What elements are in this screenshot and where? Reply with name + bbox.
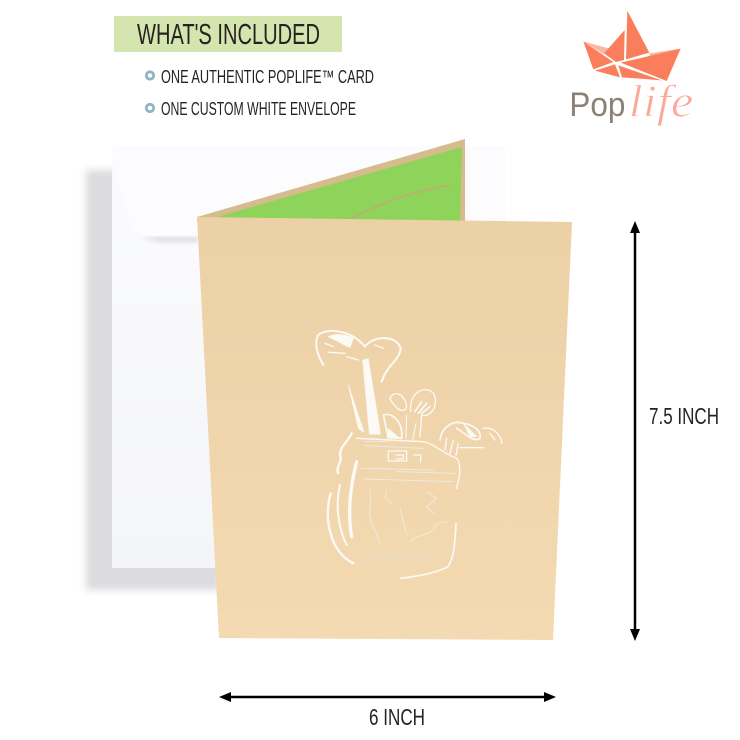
logo word: life: life (629, 77, 693, 127)
left side of bag (338, 433, 352, 473)
golf bag cut-out illustration (316, 331, 502, 578)
club shafts (363, 358, 381, 434)
flap shadow (140, 237, 198, 242)
arrow: height dimension (630, 221, 640, 641)
heading: what's included (114, 16, 342, 52)
heading: what's included: WHAT'S INCLUDED (137, 19, 320, 51)
item: poplife card (146, 67, 374, 87)
envelope (86, 146, 505, 590)
bag bottom right (401, 523, 456, 578)
item: poplife card: ONE AUTHENTIC POPLIFE™ CARD (161, 67, 374, 87)
card back flap (197, 139, 465, 222)
item: white envelope: ONE CUSTOM WHITE ENVELOPE (161, 99, 356, 119)
arrow: width dimension (219, 692, 556, 702)
label: 6 inch: 6 INCH (369, 704, 425, 730)
logo word: pop: Pop (569, 86, 625, 124)
right club (440, 422, 480, 440)
list of included items (146, 67, 374, 119)
envelope shadow (86, 170, 221, 590)
card front (197, 217, 572, 640)
item: white envelope (146, 99, 356, 119)
bag buckle (388, 451, 421, 462)
logo: poplife (569, 11, 693, 127)
icon: origami boat (583, 11, 681, 81)
bag details (369, 490, 447, 544)
bag collar (357, 438, 460, 488)
envelope flap (112, 146, 505, 236)
small club heads (390, 394, 407, 410)
large club heads (316, 331, 401, 382)
envelope body (112, 146, 505, 568)
